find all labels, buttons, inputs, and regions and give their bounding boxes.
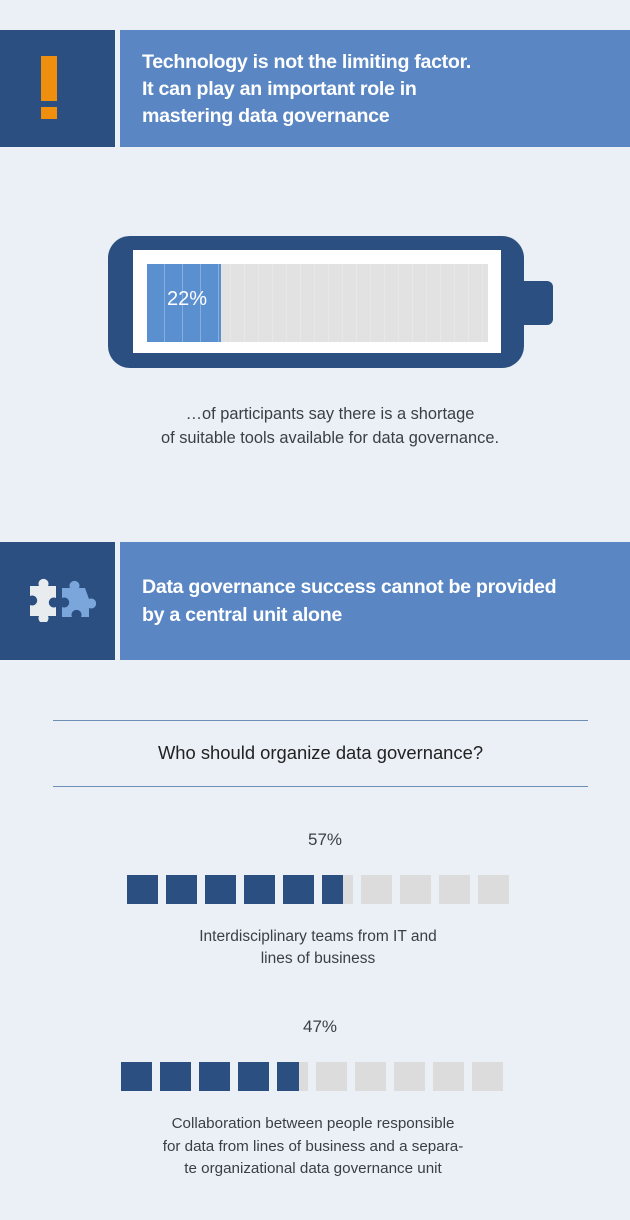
icon box: puzzle: [0, 542, 115, 660]
header 1 text: It can play an important role in: [142, 78, 417, 100]
header 2: [0, 542, 630, 660]
header 1 text: mastering data governance: [142, 105, 389, 127]
label row 1: [199, 928, 437, 967]
header 1: [0, 30, 630, 147]
header 2 text: Data governance success cannot be provided: [142, 576, 556, 598]
squares row 2: [121, 1062, 503, 1091]
label row 2: te organizational data governance unit: [184, 1160, 442, 1177]
caption: of suitable tools available for data governance.: [161, 429, 499, 447]
caption: …of participants say there is a shortage: [186, 405, 474, 423]
label row 1: Interdisciplinary teams from IT and: [199, 928, 437, 945]
icon box: exclamation: [0, 30, 115, 147]
stat 57%: 57%: [308, 830, 342, 849]
label row 2: [162, 1115, 463, 1177]
label row 1: lines of business: [261, 950, 375, 967]
squares row 1: [127, 875, 509, 904]
label row 2: Collaboration between people responsible: [172, 1115, 454, 1132]
label row 2: for data from lines of business and a separa-: [163, 1138, 463, 1154]
header 1 text: Technology is not the limiting factor.: [142, 51, 471, 73]
value 22%: 22%: [167, 288, 207, 310]
header 2 text: [120, 542, 630, 660]
stat 47%: 47%: [303, 1017, 337, 1036]
battery chart: [108, 236, 553, 368]
header 1 text: [120, 30, 630, 147]
question heading: Who should organize data governance?: [158, 742, 483, 763]
header 2 text: by a central unit alone: [142, 604, 342, 626]
caption: [161, 405, 499, 447]
